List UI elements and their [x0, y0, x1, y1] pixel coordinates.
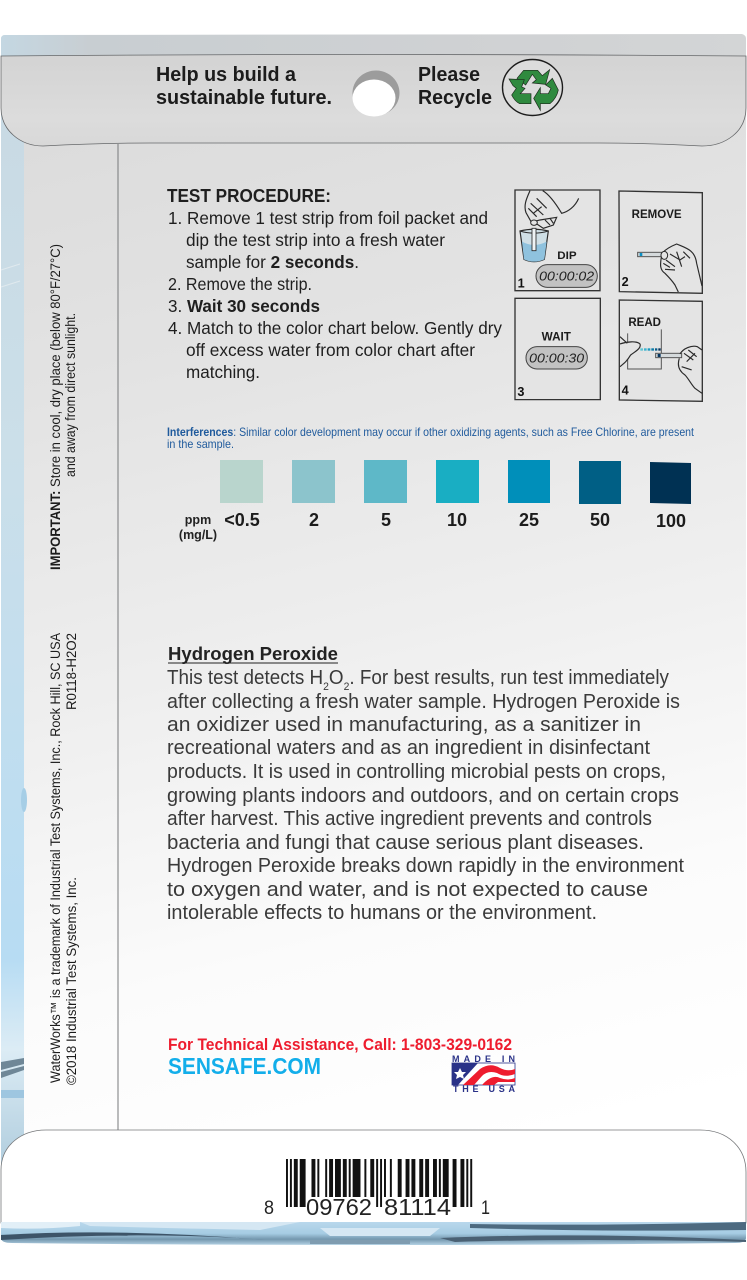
made in the usa logo: MADE IN: [452, 1054, 515, 1064]
website: SENSAFE.COM: [168, 1053, 321, 1079]
flap message: Help us build a: [156, 63, 297, 86]
test procedure text: dip the test strip into a fresh water: [186, 230, 445, 250]
barcode: [264, 1159, 490, 1220]
step 1: dip: 00:00:02: [539, 269, 595, 284]
step diagrams: [515, 190, 702, 401]
interferences note: Interferences: Similar color development may occur if other oxidizing agents, such as Free Chlorine, are present: [167, 426, 695, 439]
top band: [1, 34, 746, 146]
top flap: [1, 54, 746, 146]
barcode digits: 81114: [384, 1194, 451, 1220]
ppm values: 10: [447, 510, 467, 530]
test procedure text: sample for 2 seconds.: [186, 252, 359, 272]
barcode digits: 1: [481, 1198, 490, 1219]
ppm values: 25: [519, 510, 539, 530]
step 4: read: [619, 300, 702, 401]
ppm values: 50: [590, 510, 610, 530]
hydrogen peroxide description: recreational waters and as an ingredient in disinfectant: [167, 737, 650, 759]
fold divider line: [117, 144, 119, 1131]
please recycle text: Recycle: [418, 86, 492, 109]
hydrogen peroxide description: . For best results, run test immediately: [349, 667, 669, 689]
barcode digits: 8: [264, 1198, 274, 1219]
ppm values: [224, 510, 686, 531]
ppm values: 2: [309, 510, 319, 530]
ppm values: 5: [381, 510, 391, 530]
flap message: sustainable future.: [156, 86, 332, 109]
ppm unit label: (mg/L): [179, 528, 217, 542]
hydrogen peroxide description: growing plants indoors and outdoors, and on certain crops: [167, 785, 679, 807]
step 3: wait: 3: [517, 385, 524, 399]
rotated legal text: WaterWorks™ is a trademark of Industrial Test Systems, Inc., Rock Hill, SC USA: [48, 633, 63, 1083]
test procedure text: 4. Match to the color chart below. Gently dry: [168, 318, 502, 338]
bottom panel: [1, 1130, 746, 1245]
hydrogen peroxide description: an oxidizer used in manufacturing, as a sanitizer in: [167, 714, 641, 736]
heading: hydrogen peroxide: Hydrogen Peroxide: [168, 643, 338, 664]
please recycle text: [418, 63, 492, 109]
barcode digits: 09762: [306, 1194, 372, 1220]
icon: recycle symbol: [502, 60, 562, 116]
color chart: [179, 460, 691, 542]
barcode digits: [264, 1194, 490, 1220]
step 4: read: READ: [628, 315, 661, 329]
color swatches: [220, 460, 691, 504]
made in the usa logo: [452, 1054, 516, 1094]
rotated storage warning: IMPORTANT: Store in cool, dry place (below 80°F/27°C): [48, 244, 63, 570]
test procedure text: off excess water from color chart after: [186, 340, 475, 360]
rotated legal text: [48, 633, 79, 1085]
step 2: remove: [619, 191, 702, 293]
step 3: wait: 00:00:30: [529, 351, 585, 366]
left water strip: [1, 55, 27, 1185]
hydrogen peroxide description: bacteria and fungi that cause serious plant diseases.: [167, 832, 644, 854]
step 3: wait: [515, 298, 600, 400]
heading: test procedure: TEST PROCEDURE:: [167, 185, 331, 206]
test procedure text: 1. Remove 1 test strip from foil packet and: [168, 208, 488, 228]
hydrogen peroxide description: products. It is used in controlling microbial pests on crops,: [167, 761, 666, 783]
ppm values: 100: [656, 511, 686, 531]
hydrogen peroxide description: intolerable effects to humans or the environment.: [167, 902, 597, 924]
interferences note: [167, 426, 695, 451]
interferences note: in the sample.: [167, 438, 234, 451]
step 3: wait: WAIT: [542, 330, 572, 344]
test procedure text: 3. Wait 30 seconds: [168, 296, 320, 316]
rotated legal text: R0118-H2O2: [64, 633, 79, 710]
made in the usa logo: THE USA: [453, 1084, 516, 1094]
step 2: remove: REMOVE: [632, 207, 682, 221]
hydrogen peroxide description: Hydrogen Peroxide breaks down rapidly in the environment: [167, 855, 684, 877]
test procedure text: 2. Remove the strip.: [168, 274, 312, 294]
step 1: dip: DIP: [557, 250, 577, 262]
hydrogen peroxide description: 2: [323, 681, 329, 693]
step 4: read: 4: [622, 384, 629, 398]
test procedure text: matching.: [186, 362, 260, 382]
hydrogen peroxide description: after harvest. This active ingredient prevents and controls: [167, 808, 652, 830]
rotated storage warning: [48, 244, 78, 570]
water band: [1, 1222, 746, 1245]
ppm unit label: [179, 513, 217, 542]
hydrogen peroxide description: after collecting a fresh water sample. Hydrogen Peroxide is: [167, 691, 680, 713]
flap message: [156, 63, 332, 109]
hanger hole: [352, 70, 400, 116]
hydrogen peroxide description: [167, 643, 684, 924]
rotated legal text: ©2018 Industrial Test Systems, Inc.: [64, 877, 79, 1085]
rotated storage warning: and away from direct sunlight.: [63, 313, 78, 477]
ppm values: <0.5: [224, 510, 260, 530]
hydrogen peroxide description: This test detects H: [167, 667, 333, 689]
please recycle text: Please: [418, 63, 480, 86]
step 1: dip: [515, 190, 600, 291]
hydrogen peroxide description: to oxygen and water, and is not expected to cause: [167, 879, 648, 901]
test procedure text: [167, 185, 502, 382]
hydrogen peroxide description: 2: [344, 681, 349, 693]
hydrogen peroxide description: O: [329, 667, 344, 689]
step 2: remove: 2: [622, 275, 629, 289]
technical assistance phone: For Technical Assistance, Call: 1-803-329-0162: [168, 1035, 512, 1054]
step 1: dip: 1: [518, 276, 525, 290]
ppm unit label: ppm: [185, 513, 211, 527]
